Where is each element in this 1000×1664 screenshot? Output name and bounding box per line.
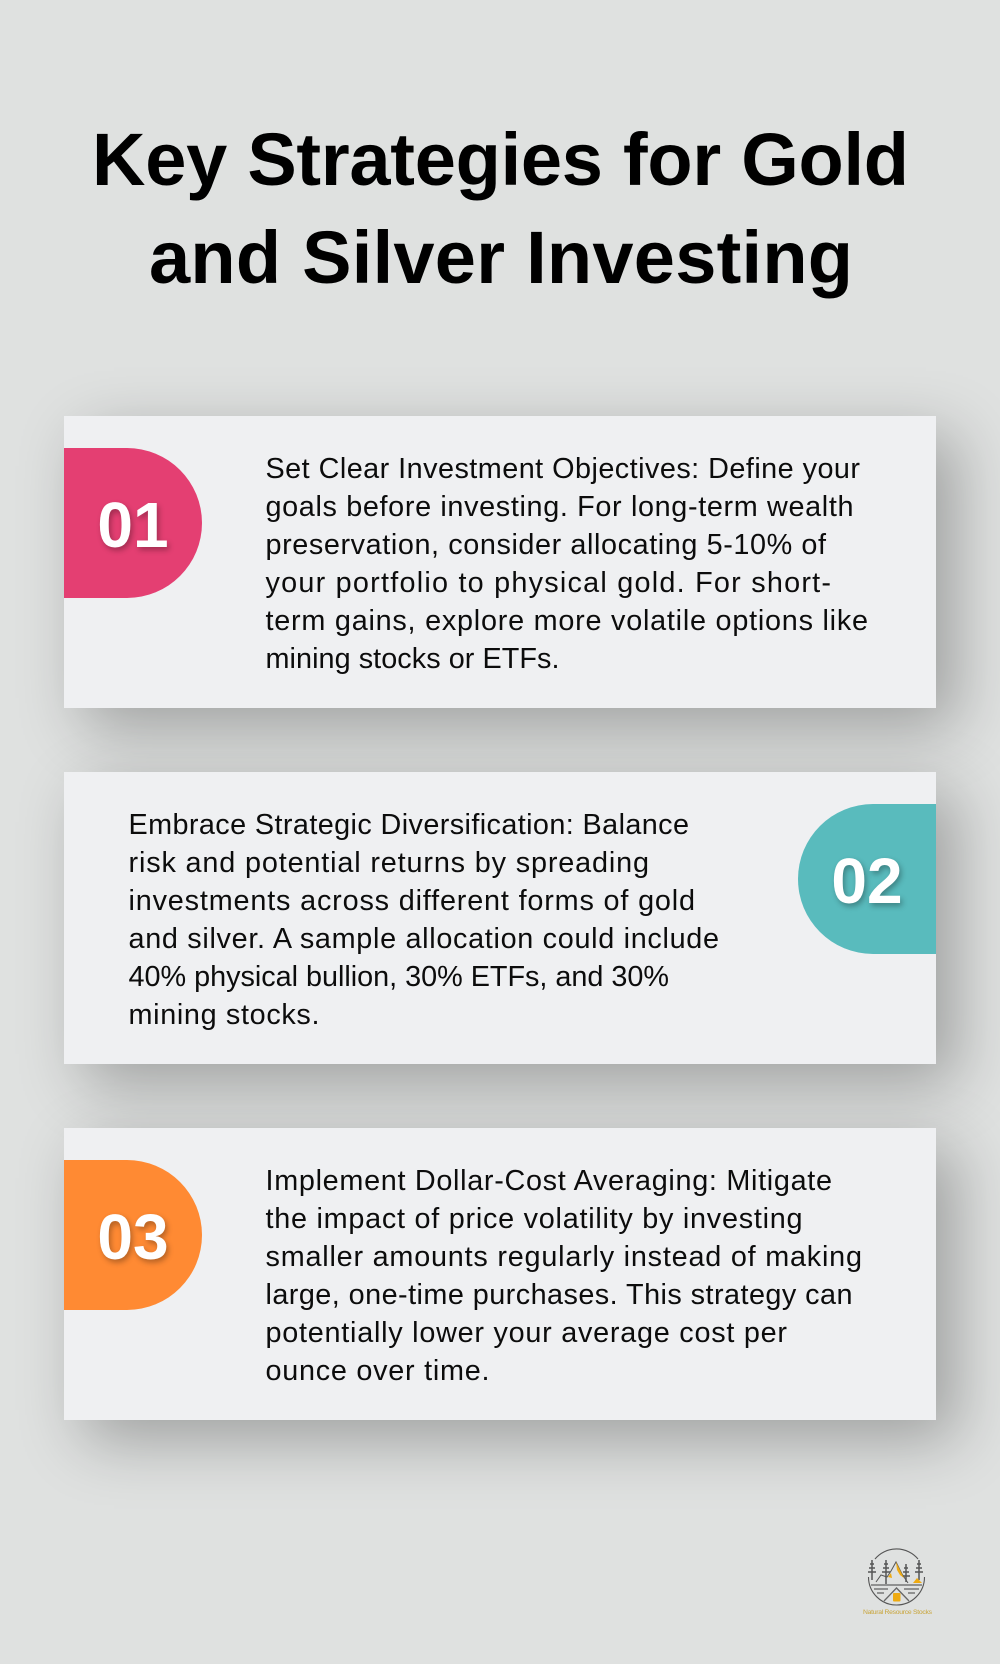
text block: strategy 1 — [266, 453, 868, 675]
text block: strategy 1: goals before investing. For long-term wealth — [266, 491, 854, 523]
text block: strategy 3: large, one-time purchases. This strategy can — [266, 1279, 852, 1311]
text block: strategy 2: Embrace Strategic Diversification: Balance — [128, 809, 689, 841]
text block: strategy 3: ounce over time. — [266, 1355, 490, 1387]
text block: strategy 1: Set Clear Investment Objectives: Define your — [266, 453, 860, 485]
badge: 01 — [64, 448, 202, 598]
text block: strategy 3: smaller amounts regularly instead of making — [266, 1241, 862, 1273]
badge: 02: 02 — [831, 845, 903, 917]
text block: strategy 3 — [266, 1165, 862, 1387]
badge: 01: 01 — [97, 489, 169, 561]
text block: strategy 3: Implement Dollar-Cost Averaging: Mitigate — [266, 1165, 832, 1197]
text block: strategy 2: 40% physical bullion, 30% ETFs, and 30% — [128, 961, 669, 993]
text block: strategy 1: preservation, consider allocating 5-10% of — [266, 529, 827, 561]
text block: strategy 1: your portfolio to physical gold. For short- — [266, 567, 831, 599]
logo: Natural Resource Stocks: Natural Resource Stocks — [863, 1609, 933, 1616]
text block: strategy 3: potentially lower your average cost per — [266, 1317, 787, 1349]
text block: strategy 1: mining stocks or ETFs. — [266, 643, 560, 675]
text block: strategy 2: and silver. A sample allocation could include — [128, 923, 719, 955]
badge: 03: 03 — [97, 1201, 169, 1273]
panel: strategy 3 — [64, 1128, 936, 1420]
panel: strategy 1 — [64, 416, 936, 708]
text block: strategy 2: investments across different forms of gold — [128, 885, 695, 917]
badge: 03 — [64, 1160, 202, 1310]
text block: strategy 1: term gains, explore more volatile options like — [266, 605, 868, 637]
text block: strategy 2: mining stocks. — [128, 999, 320, 1031]
logo: Natural Resource Stocks — [863, 1548, 933, 1616]
title: Key Strategies for Gold — [92, 118, 909, 201]
text block: strategy 2 — [128, 809, 719, 1031]
text block: strategy 2: risk and potential returns by spreading — [128, 847, 649, 879]
title: and Silver Investing — [149, 216, 853, 299]
badge: 02 — [798, 804, 936, 954]
panel: strategy 2 — [64, 772, 936, 1064]
title — [92, 118, 909, 299]
text block: strategy 3: the impact of price volatility by investing — [266, 1203, 802, 1235]
